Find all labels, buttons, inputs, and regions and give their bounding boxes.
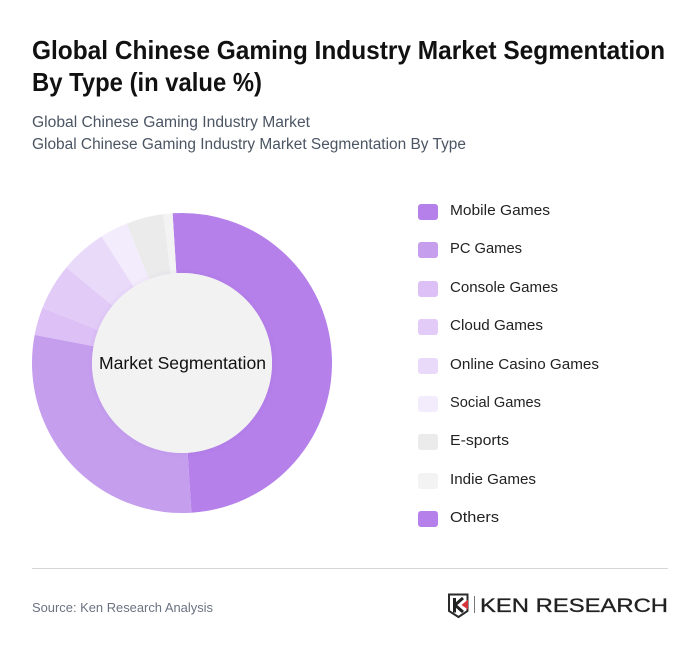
legend item: Cloud Games xyxy=(418,317,543,335)
legend item: Indie Games xyxy=(418,471,536,489)
wordmark: KEN RESEARCH xyxy=(480,596,668,617)
title xyxy=(32,35,665,97)
source note: Source: Ken Research Analysis xyxy=(32,600,213,615)
subtitle: Global Chinese Gaming Industry Market xyxy=(32,114,311,131)
legend item: Mobile Games: Mobile Games xyxy=(450,202,550,219)
segment: Cloud Games xyxy=(55,236,309,490)
donut chart xyxy=(55,236,309,490)
legend item: Cloud Games: Cloud Games xyxy=(450,317,543,334)
segment: Mobile Games xyxy=(55,236,309,490)
legend item: PC Games: PC Games xyxy=(450,240,522,257)
title: By Type (in value %) xyxy=(32,67,262,97)
legend item: Mobile Games xyxy=(418,202,550,220)
legend item: Indie Games: Indie Games xyxy=(450,471,536,488)
legend item: Online Casino Games: Online Casino Games xyxy=(450,356,599,373)
segment: Online Casino Games xyxy=(55,236,309,490)
subtitle xyxy=(32,114,466,153)
segment: Console Games xyxy=(55,236,309,490)
legend item: Console Games: Console Games xyxy=(450,279,558,296)
legend item: PC Games xyxy=(418,240,522,258)
legend item: E-sports xyxy=(418,432,509,450)
subtitle: Global Chinese Gaming Industry Market Segmentation By Type xyxy=(32,136,466,153)
donut centre xyxy=(92,273,272,453)
icon: shield xyxy=(449,594,468,617)
legend item: Others: Others xyxy=(450,509,499,526)
centre label: Market Segmentation xyxy=(99,353,266,373)
legend item: Social Games: Social Games xyxy=(450,394,541,411)
title: Global Chinese Gaming Industry Market Segmentation xyxy=(32,35,665,65)
segment: E-sports xyxy=(55,236,309,490)
logo: Ken Research xyxy=(449,594,668,617)
legend xyxy=(418,202,599,527)
segment: Social Games xyxy=(55,236,309,490)
segment: Indie Games xyxy=(55,236,309,490)
legend item: E-sports: E-sports xyxy=(450,432,509,449)
segment: PC Games xyxy=(55,236,309,490)
legend item: Others xyxy=(418,509,499,527)
legend item: Social Games xyxy=(418,394,541,412)
